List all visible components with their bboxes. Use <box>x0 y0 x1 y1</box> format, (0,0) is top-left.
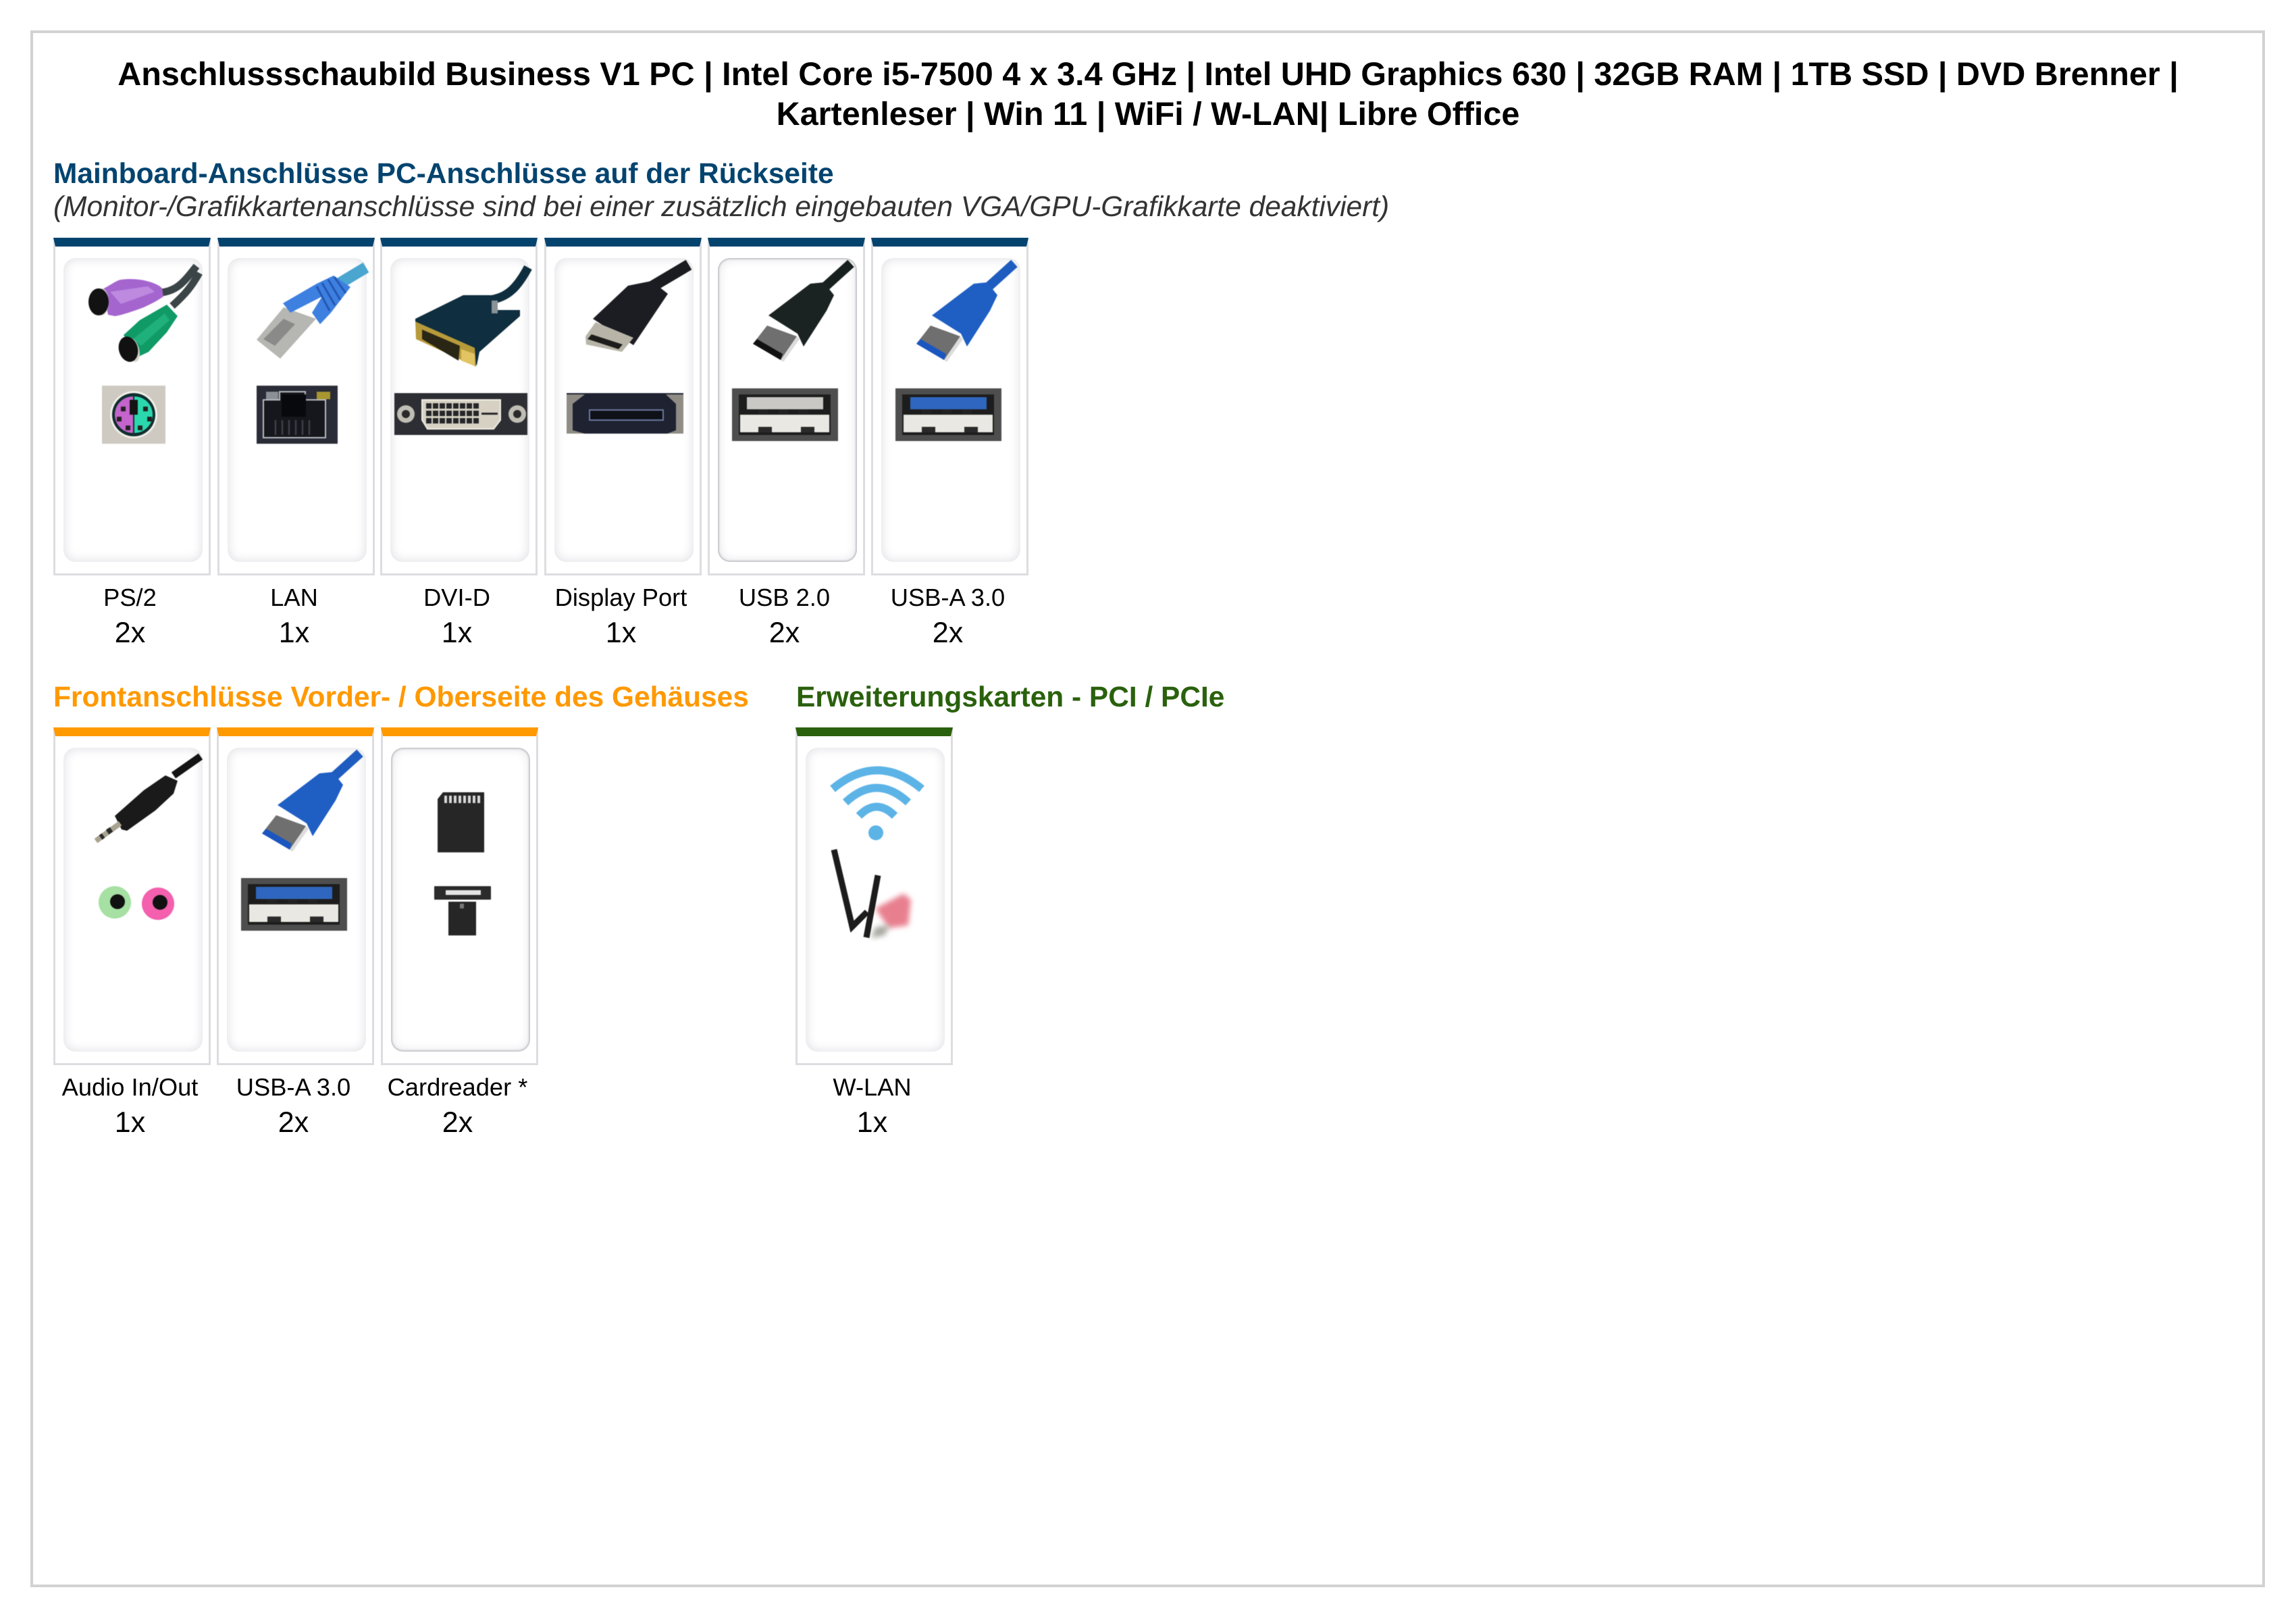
count: 1x: 1x <box>857 1106 887 1139</box>
icon: SD card and reader <box>434 792 492 936</box>
icon: WiFi symbol and antenna card <box>829 766 925 941</box>
label: LAN: LAN <box>270 584 318 611</box>
card: USB-A 3.0 front <box>217 727 374 1139</box>
heading: Erweiterungskarten: Erweiterungskarten - PCI / PCIe <box>796 681 1224 713</box>
icon: audio jack and ports <box>94 753 203 921</box>
label: W-LAN: W-LAN <box>833 1073 912 1101</box>
label: USB-A 3.0: USB-A 3.0 <box>891 584 1005 611</box>
note: Grafikkarte: (Monitor-/Grafikkartenanschlüsse sind bei einer zusätzlich eingebauten VGA/GPU-Grafikkarte deaktiviert) <box>53 190 1389 222</box>
title: Anschlussschaubild Business V1 PC | Intel Core i5-7500 4 x 3.4 GHz | Intel UHD Graphics 630 | 32GB RAM | 1TB SSD | DVD Brenner | <box>118 56 2178 93</box>
count: 1x: 1x <box>606 617 636 649</box>
card: Display Port <box>544 238 702 649</box>
count: 2x: 2x <box>442 1106 473 1139</box>
icon: DVI plug and port <box>394 265 532 436</box>
label: DVI-D: DVI-D <box>423 584 490 611</box>
card: Cardreader <box>381 727 538 1139</box>
icon: DisplayPort plug and port <box>566 259 692 434</box>
label: Cardreader: Cardreader * <box>388 1073 527 1101</box>
icon: USB 3.0 plug and port <box>895 259 1018 442</box>
count: 1x: 1x <box>442 617 472 649</box>
card: LAN <box>217 238 375 649</box>
card: USB-A 3.0 rear <box>871 238 1028 649</box>
count: 2x: 2x <box>933 617 963 649</box>
label: USB 2.0: USB 2.0 <box>739 584 830 611</box>
count: 2x: 2x <box>115 617 145 649</box>
label: USB-A 3.0: USB-A 3.0 <box>236 1073 350 1101</box>
card: W-LAN <box>795 727 953 1139</box>
icon: PS/2 plug and port <box>88 263 203 444</box>
card: DVI-D <box>380 238 538 649</box>
label: Audio In/Out: Audio In/Out <box>62 1073 198 1101</box>
heading: Frontanschlüsse: Frontanschlüsse Vorder- / Oberseite des Gehäuses <box>53 681 749 713</box>
heading: Mainboard-Anschlüsse: Mainboard-Anschlüsse PC-Anschlüsse auf der Rückseite <box>53 157 834 189</box>
card: PS/2 <box>53 238 211 649</box>
icon: USB 3.0 plug and port <box>240 749 363 931</box>
card: USB 2.0 <box>708 238 865 649</box>
icon: LAN plug and port <box>256 262 369 444</box>
count: 1x: 1x <box>279 617 309 649</box>
count: 2x: 2x <box>769 617 800 649</box>
count: 2x: 2x <box>278 1106 309 1139</box>
label: Display Port: Display Port <box>555 584 687 611</box>
card: Audio In/Out <box>53 727 211 1139</box>
count: 1x: 1x <box>115 1106 145 1139</box>
title: Kartenleser | Win 11 | WiFi / W-LAN| Libre Office <box>777 96 1519 132</box>
title <box>118 56 2178 132</box>
label: PS/2: PS/2 <box>103 584 157 611</box>
icon: USB 2.0 plug and port <box>731 259 855 442</box>
